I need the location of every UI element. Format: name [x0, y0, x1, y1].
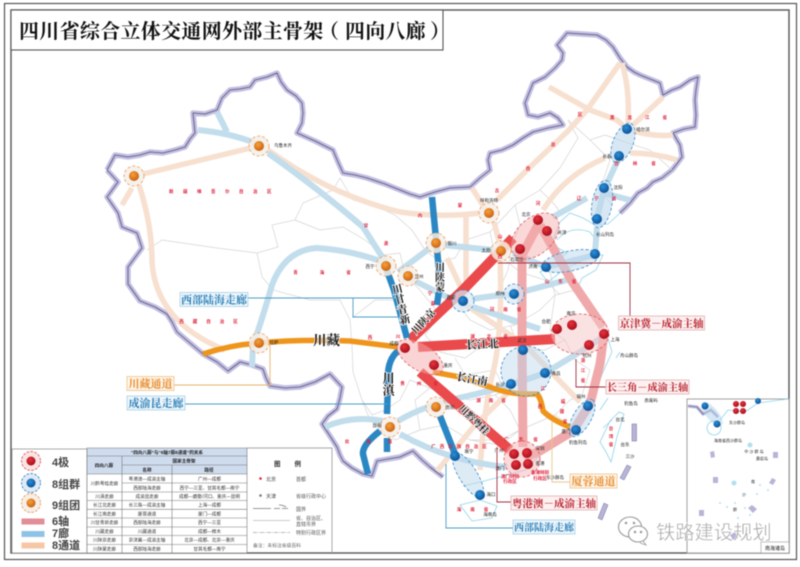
province names: 内: [418, 212, 423, 219]
table text: 川藏通道: [138, 528, 157, 535]
route names on lines: 川甘青新: [390, 283, 411, 327]
table text: 甘其毛都—南宁: [193, 546, 226, 552]
province names: 吉林省: [614, 160, 670, 167]
legend: provincial border: 省、自治区、: [296, 515, 326, 522]
legend: provincial centre: [259, 493, 326, 500]
city labels: 深圳: [536, 445, 545, 452]
city labels: 哈尔滨: [636, 126, 650, 133]
city labels: 厦门: [562, 428, 571, 435]
province names: 河南省: [490, 306, 530, 313]
table text: 川黔粤桂走廊: [91, 480, 119, 487]
table text: 厦门—成都: [198, 510, 221, 518]
table text: 名称: [142, 466, 152, 474]
city labels: 西宁: [366, 263, 375, 270]
province names: 自: [526, 165, 530, 172]
province borders: [147, 120, 672, 445]
city labels: 石家庄: [510, 256, 524, 263]
legend: SAR border: 特别行政区界: [296, 530, 326, 536]
city labels: 呼和浩特: [480, 197, 498, 204]
province names: 湾: [609, 433, 614, 440]
callout: Chengdu-Chongqing-Kunming corridor: 成渝昆走廊: [128, 396, 184, 410]
city labels: 赤尾屿: [644, 397, 658, 404]
table text: 长江北走廊: [93, 502, 116, 508]
legend: 7 corridors: 7廊: [52, 526, 69, 540]
legend: capital: 首都: [296, 476, 306, 483]
city labels: 台北: [616, 416, 625, 423]
city labels: 成都: [390, 340, 399, 347]
table text: 路径: [204, 466, 214, 474]
map legend panel: [247, 448, 332, 553]
inset island names: [714, 419, 768, 512]
watermark: account name: 铁路建设规划: [656, 522, 772, 544]
province names: 山东省: [545, 278, 585, 285]
city labels: 长沙: [496, 381, 505, 388]
province names: 江: [581, 367, 586, 374]
city labels: 郑州: [496, 290, 505, 297]
legend: 6 axes: 6轴: [52, 514, 69, 528]
city labels: 沈阳: [614, 184, 623, 191]
province names: 宁: [428, 290, 433, 297]
coastline: [460, 213, 624, 521]
legend: national border: 国界: [296, 507, 306, 513]
China land border: [107, 33, 698, 477]
callout: western land-sea corridor: 西部陆海走廊: [181, 292, 247, 306]
province names: 福: [561, 398, 566, 405]
inset reefs: [719, 442, 769, 519]
city labels: 舟山群岛: [620, 352, 638, 359]
province names: 广东省: [504, 436, 548, 443]
province names: 河: [536, 200, 541, 206]
table text: 西部陆海走廊: [133, 546, 161, 552]
table text: 成都—樟木: [198, 528, 221, 535]
province names: 甘: [364, 222, 369, 229]
table text: 长三角—成渝主轴: [129, 502, 166, 508]
legend: source note: 备注：未标注省级百科: [253, 542, 301, 549]
city labels: 澳门特别: [501, 473, 519, 480]
inset island names: 群: [733, 506, 737, 512]
legend: 8 clusters: 8组群: [52, 477, 80, 491]
province names: 黑龙江省: [610, 114, 680, 121]
legend: 8 channels: 8通道: [52, 538, 80, 552]
province names: 区: [578, 112, 583, 117]
table text: 广州—成都: [198, 476, 221, 482]
table text: 上海—成都: [198, 502, 221, 508]
callout: Sichuan-Tibet channel: 川藏通道: [128, 376, 172, 390]
city labels: 台东: [620, 441, 630, 448]
table text: 北京—成都、北京—重庆: [184, 536, 235, 544]
table header fills: [87, 448, 247, 474]
watermark: WeChat icon: [618, 517, 648, 545]
city labels: 太原: [482, 247, 491, 254]
9 groups: orange nodes: [124, 136, 511, 437]
title: （: [319, 21, 339, 43]
leader lines: [174, 263, 630, 528]
city labels: 上海: [610, 336, 620, 343]
inset island names: 南: [751, 478, 755, 484]
city labels: 武汉: [518, 337, 527, 344]
title: 四川省综合立体交通网外部主骨架: [19, 20, 324, 43]
city labels: 南宁: [464, 448, 474, 454]
city labels: 海口: [486, 491, 496, 498]
table text: 厦蓉通道: [138, 510, 157, 518]
province names: 省: [609, 441, 614, 448]
province names: 西: [538, 404, 543, 410]
city labels: 昆明: [372, 423, 382, 429]
legend heading: 图例: [274, 459, 315, 468]
city labels: 重庆: [444, 362, 453, 369]
relationship table: [87, 448, 247, 553]
8 channels: light orange: [122, 63, 677, 471]
city labels: 福州: [576, 393, 586, 400]
legend: provincial centre: 省级行政中心: [296, 493, 326, 500]
table text: 长江南走廊: [93, 510, 116, 518]
city labels: 北京: [522, 211, 531, 218]
province names: 西: [498, 254, 503, 260]
city labels: 拉萨: [270, 339, 279, 346]
table grid: [87, 448, 247, 553]
city labels: 广州: [494, 447, 504, 454]
callout: western land-sea corridor lower: 西部陆海走廊: [514, 521, 574, 534]
province names: 云南省: [345, 438, 409, 445]
city labels: 银川: [448, 240, 456, 247]
city labels: 乌鲁木齐: [274, 142, 292, 149]
province names: 川: [396, 334, 400, 339]
city labels: 钓鱼列岛: [569, 439, 587, 446]
table text: 西宁—三亚、甘其毛都—南宁: [180, 484, 240, 492]
table text: 西部陆海走廊: [133, 519, 161, 526]
table text: 京津冀—成渝主轴: [129, 536, 166, 544]
city labels: 香港: [536, 460, 545, 467]
city labels: 海南岛: [483, 511, 497, 518]
table text: 西宁—三亚: [198, 519, 221, 526]
orange channels: [203, 340, 570, 427]
city labels: 贵阳: [446, 404, 455, 411]
city labels: 长山列岛: [596, 231, 614, 238]
province names: 辽宁省: [577, 195, 629, 202]
legend: capital: 北京: [266, 476, 276, 483]
inset island names: 中 沙 群 岛: [744, 448, 764, 454]
province names: 肃: [384, 240, 389, 247]
inset: South China Sea islands: [687, 398, 789, 553]
table text: [91, 449, 240, 552]
callout: Xiamen-Chengdu channel: 厦蓉通道: [572, 474, 616, 488]
title: [11, 10, 450, 50]
table text: 粤港澳—成渝主轴: [129, 476, 166, 482]
inset island names: 黄岩岛: [756, 455, 768, 461]
city labels: 合肥: [542, 318, 551, 325]
city labels: [270, 126, 658, 518]
inset dash marks: [699, 451, 778, 540]
highlighted dark blue corridors: [363, 197, 455, 474]
city labels: 香港特别: [531, 469, 549, 476]
legend: capital: [259, 476, 306, 483]
city labels: 杭州: [582, 352, 592, 359]
legend: provincial border: [253, 515, 326, 528]
route names on lines: 长江北: [465, 336, 499, 352]
callout: Yangtze Delta axis: 长三角－成渝主轴: [607, 381, 688, 394]
province names: 浙: [581, 357, 586, 364]
table text: 国家主骨架: [173, 458, 196, 464]
city labels: 南京: [566, 310, 576, 317]
province names: 建: [560, 408, 565, 415]
table text: 川滇走廊: [95, 493, 114, 500]
city labels: 济南: [528, 263, 538, 270]
province names: 蒙: [458, 202, 463, 208]
table text: 成渝昆走廊: [136, 493, 159, 500]
inset island names: 沙: [742, 492, 746, 497]
province names: 省: [563, 418, 568, 425]
route names on lines: 长江南: [455, 370, 489, 389]
map of China with transport network: [107, 33, 704, 534]
table text: 西部陆海走廊: [133, 484, 161, 492]
province names: 省: [581, 377, 586, 384]
table text: 成都—磨憨/河口、重庆—昆明: [179, 493, 240, 500]
province names: 广西壮族自治区: [431, 443, 491, 450]
city labels: 长春: [602, 153, 612, 160]
legend: 9 groups: 9组团: [52, 498, 80, 512]
inset island names: 海南省西沙群岛: [714, 437, 742, 443]
city labels: 兰州: [414, 273, 424, 279]
callout: Beijing-Tianjin-Hebei axis: 京津冀－成渝主轴: [620, 317, 704, 330]
city labels: 东沙群岛: [546, 474, 564, 481]
province names: 青海省: [293, 269, 373, 276]
province names: 西: [368, 335, 373, 341]
legend: provincial border: 直辖市界: [296, 521, 316, 528]
legend: provincial centre: 天津: [266, 493, 276, 500]
table text: 四向八廊: [95, 462, 114, 469]
table text: “四向八廊”与“6轴7廊8通道”的关系: [131, 449, 203, 456]
city labels: 钓鱼岛: [624, 400, 638, 407]
city labels: 西安: [446, 294, 456, 301]
province names: [169, 112, 680, 513]
inset title box: [761, 542, 789, 553]
route names on lines: 川滇: [380, 372, 395, 397]
city labels: 天津: [558, 229, 567, 236]
title: ）: [430, 21, 450, 43]
province names: 湖北省: [470, 333, 520, 340]
inset island names: 东沙群岛: [729, 419, 745, 425]
province names: 西藏自治区: [179, 318, 247, 325]
city labels: 行政区: [503, 478, 517, 485]
province names: 治: [551, 141, 556, 148]
province names: 江: [541, 385, 546, 392]
province names: 海南省: [457, 506, 497, 513]
inset title box: 南海诸岛: [765, 545, 785, 552]
route names on lines: [313, 262, 499, 438]
province names: 贵州省: [400, 380, 450, 387]
nine-dash line marks: [598, 424, 636, 520]
title: 四向八廊: [345, 19, 426, 43]
cluster ellipses: [391, 120, 640, 502]
legend: 4 poles: 4极: [52, 455, 69, 469]
province names: 夏: [431, 301, 436, 306]
province names: 新疆维吾尔自治区: [169, 188, 281, 195]
table text: 川陕京走廊: [93, 536, 116, 544]
legend symbols panel: [12, 449, 87, 553]
table text: 川陕蒙走廊: [93, 546, 116, 552]
table text: 川甘青新走廊: [91, 519, 119, 526]
6 axes: pink and red: [410, 225, 604, 458]
province names: 湖南省: [476, 397, 514, 404]
4 poles: red nodes: [400, 215, 609, 470]
7 corridors: light blue: [198, 112, 630, 467]
city labels: 行政区: [533, 475, 547, 482]
route names on lines: 川陕蒙: [432, 262, 444, 293]
table text: 川藏走廊: [95, 528, 114, 535]
city labels: 三沙: [626, 454, 635, 459]
route names on lines: 川藏: [313, 332, 340, 348]
callout: Guangdong-HK-Macao axis: 粤港澳－成渝主轴: [512, 497, 596, 510]
inset nodes: [702, 398, 761, 428]
route names on lines: 川陕京: [409, 305, 439, 337]
province names: 山: [498, 233, 503, 240]
city labels: 澳门: [496, 465, 505, 472]
city labels: 南昌: [552, 370, 560, 377]
route names on lines: 川黔粤桂: [456, 403, 492, 438]
province names: 台: [609, 425, 614, 432]
inset border and coast: [688, 399, 788, 435]
8 clusters: blue nodes: [450, 124, 632, 500]
province names: 古: [495, 187, 500, 194]
